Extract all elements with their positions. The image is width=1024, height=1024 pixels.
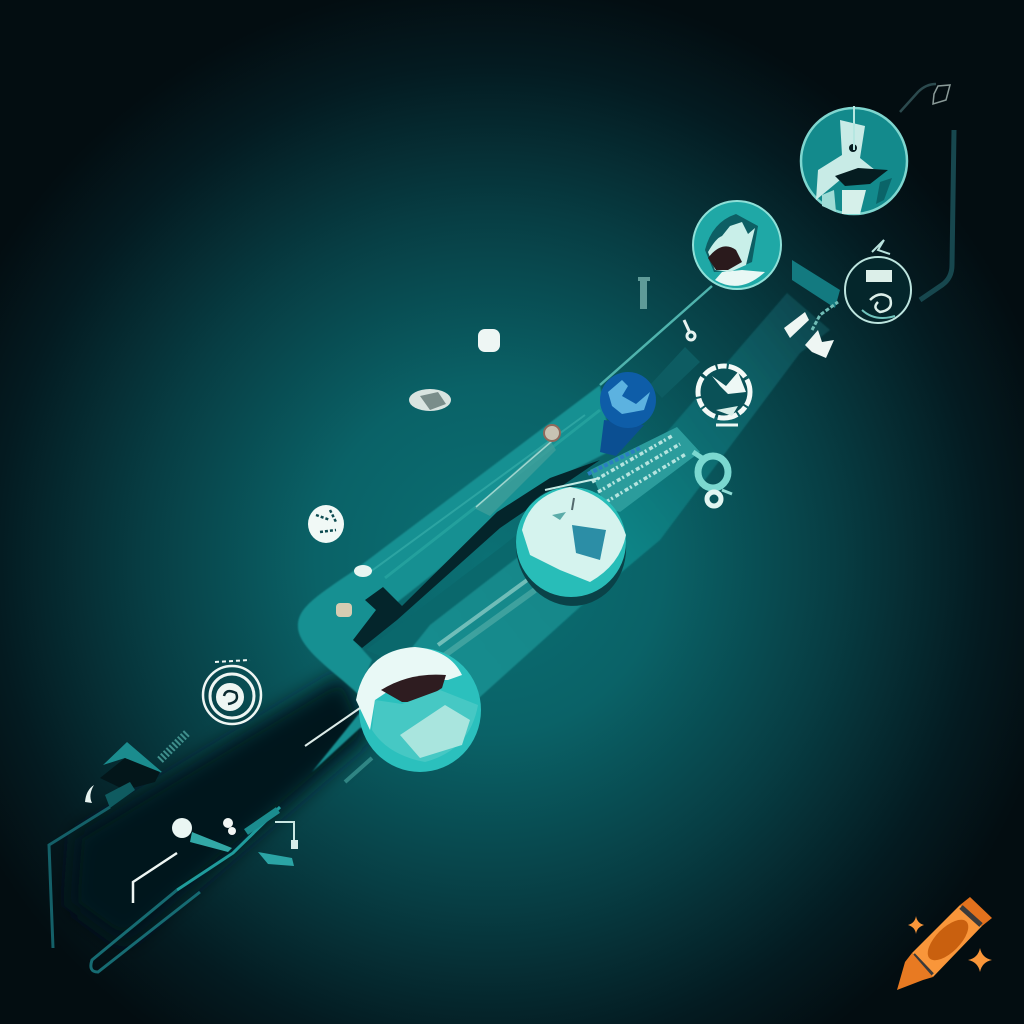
leader line to top circle: [600, 286, 712, 385]
icon: small oval marker: [354, 565, 372, 577]
top right connector line: [920, 130, 954, 300]
icon: orange crayon logo: [897, 897, 992, 990]
icon: sketched key: [684, 320, 695, 340]
top right short connector: [900, 84, 936, 112]
diagonal band: channel between arms: [366, 470, 600, 665]
icon: large glass circle: [356, 647, 481, 772]
left bracket lines: [49, 807, 280, 972]
icon: elbow stud: [336, 603, 352, 617]
diagonal band: lower teal arm: [312, 260, 840, 782]
icon: bottom left tool cluster: [133, 810, 298, 903]
icon: teal ring with spiral: [693, 452, 732, 506]
icon: pendant bag outline: [845, 240, 911, 323]
icon: square dot: [478, 329, 500, 352]
white needle line: [305, 708, 360, 746]
dark diagonal shadow band: [70, 672, 370, 945]
icon: white globe outline: [698, 366, 750, 425]
dark bar beside globe: [650, 347, 700, 398]
icon: upper teal ring circle: [693, 201, 781, 289]
icon: gem sketch: [409, 389, 451, 411]
diagonal band: pattern strip: [588, 427, 700, 512]
icon: large crystal circle: [506, 477, 636, 615]
icon: small tag outline: [933, 85, 950, 104]
icon: concentric spiral seal: [203, 660, 261, 724]
icon: blue globe: [600, 372, 656, 456]
icon: bead on arm: [544, 425, 560, 441]
dark slot: [353, 460, 600, 648]
icon: top right teal circle: [801, 106, 907, 214]
icon: left angled bracket: [85, 732, 188, 808]
icon: speckled white coin: [308, 505, 344, 543]
diagonal band: upper teal arm with rounded elbow: [298, 385, 612, 694]
icon: white broken gadget: [784, 302, 838, 358]
icon: small pin: [638, 277, 650, 309]
